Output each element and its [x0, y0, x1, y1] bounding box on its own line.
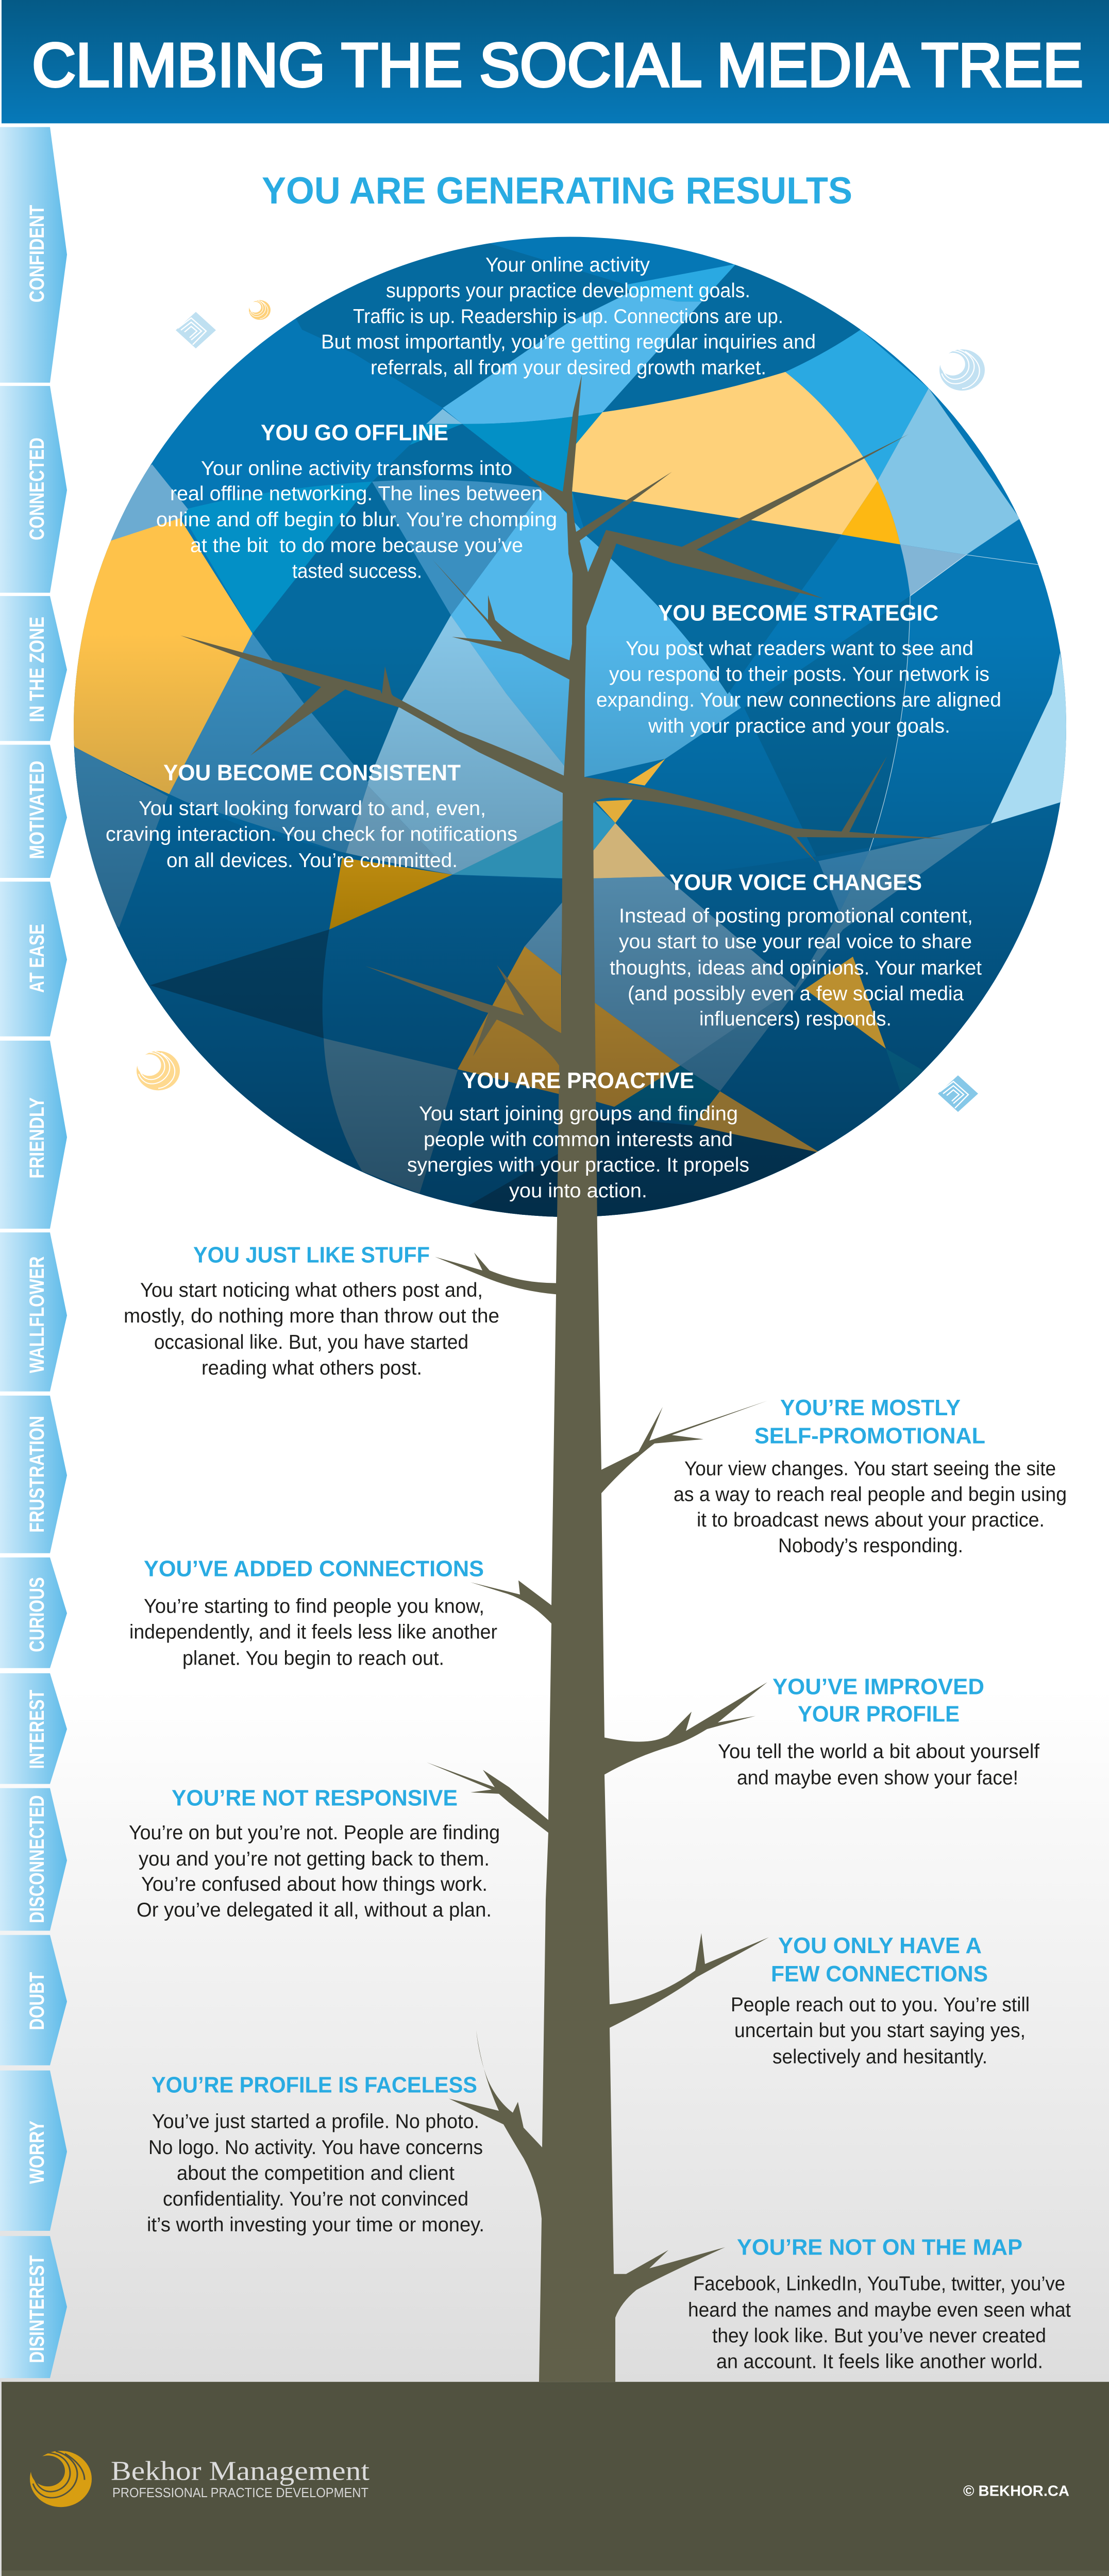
text block: you go offline [156, 420, 557, 582]
text block: mostly self-promotional: it to broadcast news about your practice. [697, 1509, 1045, 1531]
tab: friendly [0, 1041, 67, 1229]
text block: mostly self-promotional: SELF-PROMOTIONAL [754, 1423, 985, 1448]
text block: only a few connections [731, 1933, 1030, 2068]
text block: not responsive: You’re confused about how things work. [141, 1873, 488, 1895]
tab: connected: CONNECTED [25, 437, 48, 540]
tab: in the zone [0, 596, 67, 741]
text block: you just like stuff: reading what others post. [201, 1357, 422, 1379]
tab: doubt [0, 1935, 67, 2065]
text block: only a few connections: People reach out to you. You’re still [731, 1993, 1030, 2016]
logo wordmark: Bekhor Management [111, 2456, 370, 2486]
text block: you go offline: tasted success. [292, 560, 422, 582]
text block: added connections: independently, and it feels less like another [129, 1620, 497, 1643]
icon: pale diamond [176, 312, 216, 348]
text block: not on the map: an account. It feels like another world. [716, 2350, 1043, 2372]
text block: mostly self-promotional: Your view changes. You start seeing the site [684, 1457, 1056, 1480]
text block: you go offline: online and off begin to blur. You’re chomping [156, 508, 557, 531]
text block: improved your profile: You tell the world a bit about yourself [718, 1740, 1040, 1762]
text block: your voice changes: influencers) responds. [699, 1007, 892, 1030]
tab: in the zone: IN THE ZONE [25, 617, 48, 722]
text block: generating results: Your online activity [485, 253, 650, 276]
tab: curious [0, 1557, 67, 1668]
text block: improved your profile: and maybe even show your face! [737, 1766, 1018, 1789]
text block: you just like stuff: mostly, do nothing more than throw out the [124, 1304, 499, 1327]
text block: you are proactive [407, 1067, 749, 1201]
text block: only a few connections: uncertain but you start saying yes, [734, 2019, 1026, 2042]
text block: you become consistent: You start looking forward to and, even, [139, 797, 486, 820]
text block: you are proactive: you into action. [509, 1179, 647, 1201]
text block: you become strategic: you respond to their posts. Your network is [609, 663, 989, 685]
icon: yellow swirl [136, 1051, 180, 1090]
text block: not responsive: Or you’ve delegated it all, without a plan. [137, 1899, 492, 1921]
tab: confident: CONFIDENT [25, 205, 48, 302]
tab: disinterest: DISINTEREST [25, 2255, 48, 2363]
heading: YOU’RE NOT RESPONSIVE [172, 1785, 458, 1810]
depth shading overlay [67, 633, 1072, 1224]
tab: disconnected: DISCONNECTED [25, 1795, 48, 1923]
copyright: © BEKHOR.CA [963, 2483, 1069, 2499]
text block: you just like stuff: occasional like. But, you have started [154, 1331, 468, 1353]
text block: generating results [321, 253, 816, 379]
tab: frustration: FRUSTRATION [25, 1416, 48, 1533]
text block: you are proactive: people with common interests and [424, 1128, 733, 1150]
tab: motivated: MOTIVATED [25, 760, 48, 859]
tree trunk and branches [180, 375, 945, 2382]
side tabs: emotional stages [0, 127, 67, 2378]
text block: your voice changes: thoughts, ideas and opinions. Your market [610, 956, 982, 979]
text block: you become strategic: with your practice and your goals. [648, 715, 950, 737]
text block: you go offline: real offline networking. The lines between [170, 482, 543, 505]
tab: friendly: FRIENDLY [25, 1097, 48, 1178]
text block: you just like stuff [124, 1242, 499, 1379]
text block: mostly self-promotional: Nobody’s responding. [778, 1534, 963, 1556]
text block: your voice changes: you start to use your real voice to share [619, 930, 972, 953]
text block: you are proactive: synergies with your practice. It propels [407, 1154, 749, 1176]
heading: YOU’RE PROFILE IS FACELESS [152, 2072, 477, 2097]
text block: profile is faceless: it’s worth investing your time or money. [147, 2213, 484, 2236]
text block: not on the map [688, 2234, 1071, 2372]
tab: interest: INTEREST [25, 1690, 48, 1769]
text block: profile is faceless: No logo. No activity. You have concerns [148, 2136, 483, 2158]
text block: mostly self-promotional [674, 1395, 1067, 1556]
text block: improved your profile: YOUR PROFILE [798, 1701, 960, 1726]
text block: improved your profile [718, 1674, 1040, 1789]
heading: YOU GO OFFLINE [261, 420, 448, 445]
section heading: you are generating results: YOU ARE GENERATING RESULTS [262, 170, 852, 212]
text block: your voice changes: (and possibly even a few social media [628, 982, 964, 1005]
text block: you go offline: Your online activity transforms into [201, 457, 512, 480]
logo tagline: PROFESSIONAL PRACTICE DEVELOPMENT [112, 2485, 368, 2500]
tab: wallflower: WALLFLOWER [25, 1257, 48, 1373]
heading: YOU ARE PROACTIVE [462, 1067, 694, 1093]
text block: you become consistent: on all devices. You’re committed. [166, 849, 458, 872]
text block: profile is faceless: confidentiality. You’re not convinced [163, 2188, 468, 2210]
heading: YOU BECOME CONSISTENT [163, 760, 461, 785]
tab: worry [0, 2071, 67, 2231]
text block: generating results: But most importantly, you’re getting regular inquiries and [321, 330, 816, 353]
heading: YOU’VE IMPROVED [772, 1674, 984, 1699]
text block: you become consistent: craving interaction. You check for notifications [106, 823, 517, 845]
tab: worry: WORRY [25, 2121, 48, 2184]
text block: added connections [129, 1555, 497, 1669]
text block: not responsive [129, 1785, 500, 1921]
heading: YOU ONLY HAVE A [778, 1933, 982, 1958]
heading: YOU’RE NOT ON THE MAP [737, 2234, 1022, 2260]
text block: not on the map: they look like. But you’ve never created [712, 2324, 1046, 2347]
text block: you go offline: at the bit to do more because you’ve [190, 534, 523, 556]
tab: curious: CURIOUS [25, 1577, 48, 1652]
text block: generating results: supports your practice development goals. [386, 279, 750, 302]
text block: generating results: referrals, all from your desired growth market. [371, 356, 766, 379]
icon: blue diamond [938, 1075, 978, 1112]
tab: motivated [0, 744, 67, 878]
text block: generating results: Traffic is up. Readership is up. Connections are up. [353, 305, 783, 328]
heading: YOUR VOICE CHANGES [669, 870, 922, 895]
heading: YOU’VE ADDED CONNECTIONS [144, 1555, 484, 1581]
text block: your voice changes [610, 870, 982, 1030]
tab: at ease [0, 882, 67, 1037]
text block: you become strategic: expanding. Your new connections are aligned [596, 689, 1001, 711]
tab: connected [0, 386, 67, 593]
text block: your voice changes: Instead of posting promotional content, [619, 904, 973, 927]
text block: added connections: You’re starting to find people you know, [144, 1595, 484, 1617]
text block: you become consistent [106, 760, 517, 872]
text block: you just like stuff: You start noticing what others post and, [140, 1279, 483, 1301]
tab: disinterest [0, 2236, 67, 2378]
tab: frustration [0, 1396, 67, 1553]
heading: YOU JUST LIKE STUFF [193, 1242, 430, 1267]
text block: not responsive: You’re on but you’re not. People are finding [129, 1821, 500, 1844]
header banner [2, 0, 1109, 123]
text block: only a few connections: FEW CONNECTIONS [771, 1961, 988, 1986]
tab: doubt: DOUBT [25, 1972, 48, 2030]
tab: at ease: AT EASE [25, 924, 48, 993]
heading: YOU BECOME STRATEGIC [658, 600, 938, 625]
icon: pale blue swirl [938, 349, 985, 391]
text block: you become strategic [596, 600, 1001, 737]
icon: Bekhor logo swirl [28, 2451, 92, 2507]
tab: wallflower [0, 1232, 67, 1392]
decorative tree canopy oval [52, 230, 1082, 1243]
text block: only a few connections: selectively and hesitantly. [772, 2045, 987, 2068]
tab: interest [0, 1673, 67, 1784]
text block: not responsive: you and you’re not getting back to them. [139, 1848, 490, 1870]
footer band [2, 2382, 1109, 2576]
text block: profile is faceless [147, 2072, 484, 2236]
heading: YOU’RE MOSTLY [780, 1395, 961, 1420]
text block: you become strategic: You post what readers want to see and [626, 637, 973, 659]
text block: added connections: planet. You begin to reach out. [182, 1647, 444, 1669]
text block: you are proactive: You start joining groups and finding [419, 1102, 738, 1125]
text block: profile is faceless: You’ve just started a profile. No photo. [152, 2110, 479, 2132]
tab: confident [0, 127, 67, 383]
text block: profile is faceless: about the competition and client [177, 2162, 455, 2184]
icon: small yellow swirl [248, 300, 271, 320]
tab: disconnected [0, 1788, 67, 1930]
